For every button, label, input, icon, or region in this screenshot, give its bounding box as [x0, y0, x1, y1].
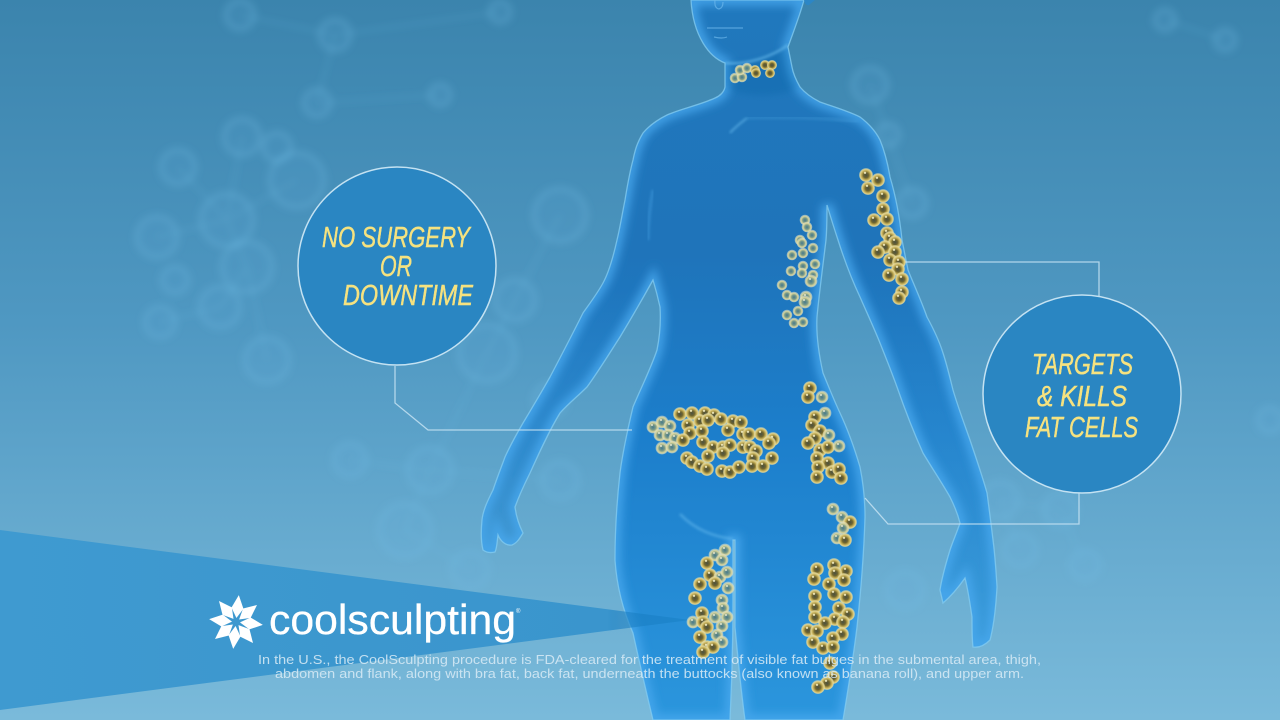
connector line: arm to targets [905, 262, 1099, 297]
callout: targets and kills fat cells: FAT CELLS [1025, 412, 1138, 444]
fat cells: flank [777, 215, 820, 328]
callout: no surgery: DOWNTIME [343, 280, 474, 312]
logo: coolsculpting [206, 592, 521, 652]
fat cells: neck [730, 60, 777, 83]
fat cells: hip [801, 381, 848, 485]
callout: no surgery: NO SURGERY [322, 222, 472, 254]
callout: targets and kills fat cells [983, 295, 1181, 493]
disclaimer text: abdomen and flank, along with bra fat, back fat, underneath the buttocks (also known as banana roll), and upper arm. [275, 666, 1024, 681]
face details [707, 0, 743, 38]
fat cells: left thigh [687, 544, 734, 659]
fat cells: outer thigh small [827, 503, 857, 547]
callout: no surgery: OR [380, 251, 412, 283]
disclaimer text [258, 652, 1041, 681]
disclaimer text: In the U.S., the CoolSculpting procedure is FDA-cleared for the treatment of visible fat bulges in the submental area, thigh, [258, 652, 1041, 667]
left blue banner [0, 530, 690, 710]
fat cells: abdomen [647, 406, 780, 479]
logo: coolsculpting: coolsculpting [269, 596, 516, 643]
callout: targets and kills fat cells: TARGETS [1032, 349, 1133, 381]
connector line: thigh to targets [865, 492, 1079, 524]
fat cells: upper arm [859, 168, 909, 305]
human body figure [470, 0, 1010, 720]
fat cells: right thigh [801, 558, 855, 694]
ear [804, 0, 815, 5]
callout: no surgery [298, 167, 496, 365]
connector line: no surgery [395, 366, 632, 430]
icon: snowflake [206, 592, 266, 652]
logo: coolsculpting: ® [516, 608, 521, 615]
callout: targets and kills fat cells: & KILLS [1037, 381, 1128, 413]
